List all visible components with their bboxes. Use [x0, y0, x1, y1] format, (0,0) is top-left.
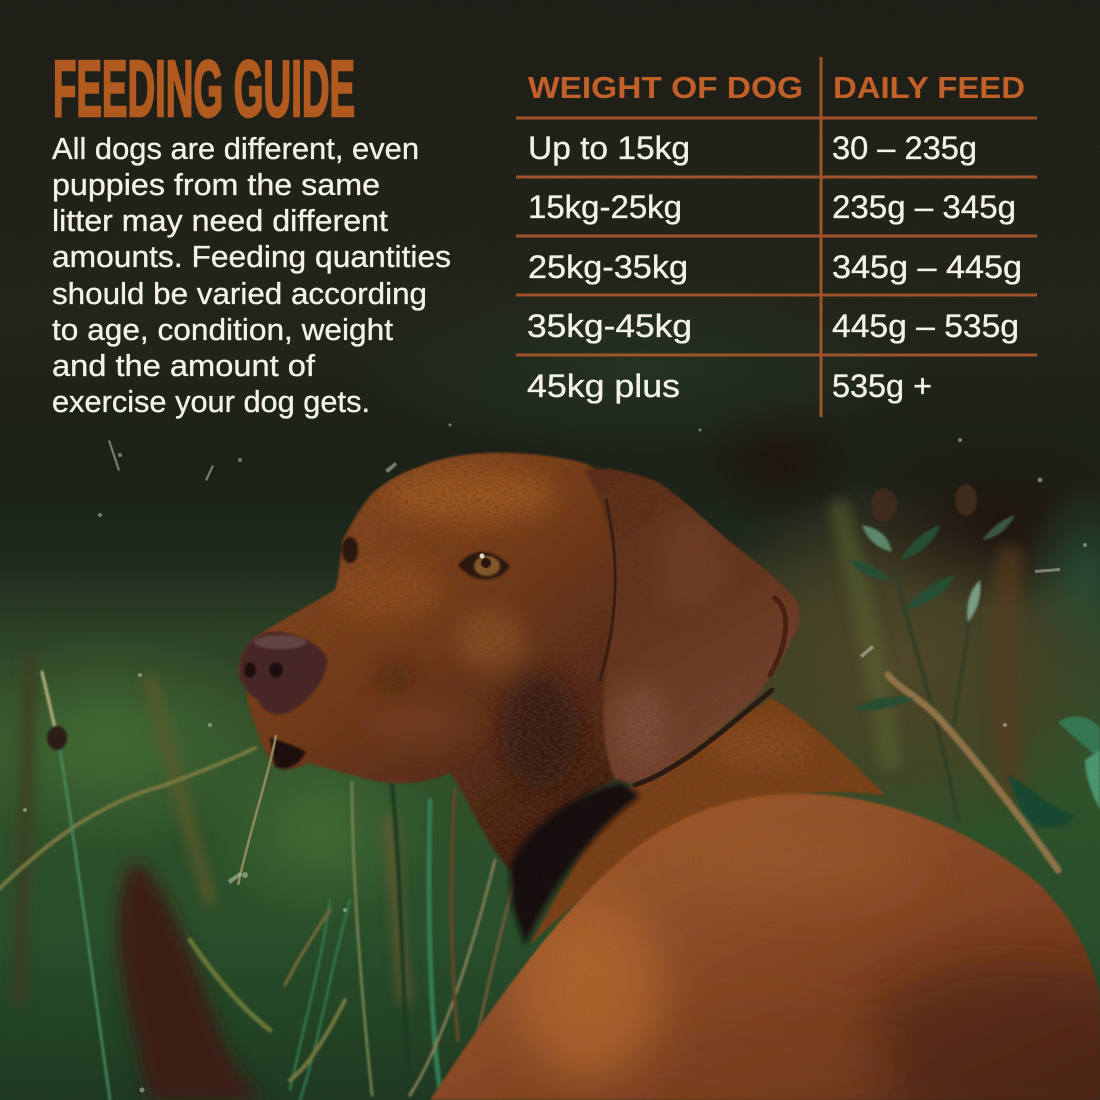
- intro text block: All dogs are different, even: [52, 131, 419, 166]
- intro text block: litter may need different: [52, 203, 388, 238]
- infographic canvas: FEEDING GUIDE: [53, 44, 355, 133]
- dog head shading and fur texture: [230, 445, 890, 955]
- intro text block: should be varied according: [52, 276, 427, 311]
- row: 25kg to 35kg: 25kg-35kg: [528, 249, 688, 285]
- dog fold and collar lines: [600, 500, 786, 785]
- dog eyes: [342, 537, 510, 579]
- row: 35kg to 45kg: 445g – 535g: [832, 308, 1019, 344]
- table header: DAILY FEED: [833, 70, 1025, 105]
- fur texture: [230, 445, 890, 955]
- dog body: [430, 793, 1100, 1100]
- reed seed head: [47, 726, 67, 750]
- feeding table: [516, 57, 1037, 417]
- intro text block: exercise your dog gets.: [52, 384, 370, 419]
- row: 15kg to 25kg: 235g – 345g: [832, 189, 1016, 225]
- row: up to 15kg: 30 – 235g: [832, 130, 977, 166]
- blurred foreground tail: [118, 860, 265, 1100]
- row: 45kg plus: [527, 368, 932, 404]
- row: 35kg to 45kg: 35kg-45kg: [527, 308, 692, 344]
- row: 15kg to 25kg: [528, 189, 1016, 225]
- intro text block: [52, 131, 451, 419]
- row: 35kg to 45kg: [527, 308, 1019, 344]
- table header: WEIGHT OF DOG: [528, 70, 803, 105]
- row: up to 15kg: Up to 15kg: [528, 130, 690, 166]
- dog ear: [584, 469, 800, 783]
- grass blade at mouth: [238, 735, 276, 885]
- dog head: [239, 453, 626, 870]
- intro text block: to age, condition, weight: [52, 312, 393, 347]
- intro text block: puppies from the same: [52, 167, 380, 202]
- blurred brown reeds: [20, 510, 1010, 1000]
- dog nose and mouth: [239, 632, 327, 769]
- grass and reeds, lower left: [0, 672, 515, 1100]
- dog neck fur: [530, 698, 885, 945]
- row: 45kg plus: 45kg plus: [527, 368, 680, 404]
- intro text block: and the amount of: [52, 348, 315, 383]
- row: 15kg to 25kg: 15kg-25kg: [528, 189, 682, 225]
- table header: [528, 70, 1025, 105]
- plants and leaves, right side: [850, 484, 1100, 870]
- row: up to 15kg: [528, 130, 977, 166]
- row: 45kg plus: 535g +: [832, 368, 932, 404]
- row: 25kg to 35kg: 345g – 445g: [832, 249, 1022, 285]
- table grid lines: [516, 57, 1037, 417]
- intro text block: amounts. Feeding quantities: [52, 239, 451, 274]
- dog dark collar and chest shadow: [510, 782, 640, 945]
- row: 25kg to 35kg: [528, 249, 1022, 285]
- dog: [230, 445, 1100, 1100]
